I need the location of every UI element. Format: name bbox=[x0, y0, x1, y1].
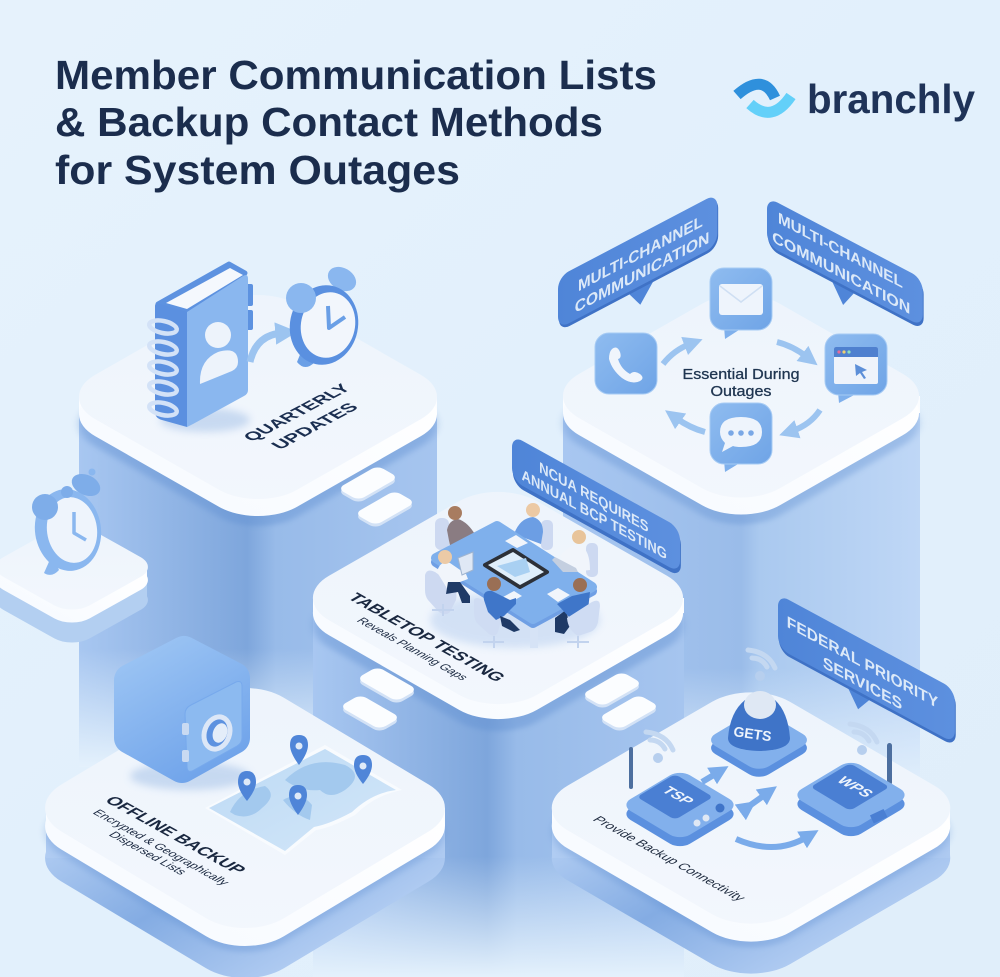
icons: wifi signals bbox=[646, 650, 877, 763]
documents bbox=[503, 535, 570, 602]
laptop: back right bbox=[552, 557, 578, 572]
banner: ncua requires annual bcp testing bbox=[512, 435, 681, 578]
label: essential during outages bbox=[682, 366, 800, 400]
logo: branchly bbox=[737, 76, 975, 122]
label: essential during outages: Outages bbox=[710, 383, 772, 400]
tablet bbox=[485, 550, 547, 587]
title: for System Outages bbox=[55, 147, 460, 193]
pin: left bbox=[238, 771, 256, 801]
icon: gets device: GETS bbox=[733, 723, 773, 744]
icon: wps device bbox=[792, 743, 910, 840]
icon: email bbox=[710, 268, 772, 339]
banner: multi-channel communication right: COMMUNICATION bbox=[772, 229, 910, 318]
label: tabletop testing: Reveals Planning Gaps bbox=[353, 616, 472, 682]
pin: top bbox=[290, 735, 308, 765]
title bbox=[55, 52, 657, 193]
panel: multi-channel platform bbox=[540, 268, 942, 796]
banner: multi-channel communication left: MULTI-CHANNEL bbox=[578, 213, 703, 295]
label: quarterly updates: UPDATES bbox=[267, 400, 363, 452]
banner: multi-channel communication right bbox=[767, 197, 924, 347]
banner: multi-channel communication right: MULTI-CHANNEL bbox=[778, 210, 903, 292]
arrows: device links bbox=[702, 773, 807, 847]
arrows: channel cycle bbox=[663, 342, 820, 432]
table bbox=[436, 526, 592, 648]
banner: multi-channel communication left bbox=[558, 193, 718, 348]
icon: alarm clock bbox=[282, 262, 366, 371]
panel: offline backup platform bbox=[22, 652, 468, 977]
person: left with tablet bbox=[425, 550, 473, 616]
side pills: quarterly platform bbox=[338, 466, 415, 528]
icon: gets device bbox=[705, 691, 813, 780]
panel: small clock platform bbox=[0, 468, 158, 648]
icon: address book bbox=[148, 264, 253, 432]
label: offline backup: OFFLINE BACKUP bbox=[101, 794, 250, 877]
logo: branchly: branchly bbox=[807, 76, 975, 122]
illustration: world map with pins bbox=[205, 735, 402, 855]
label: tabletop testing: TABLETOP TESTING bbox=[344, 591, 510, 684]
person: back right bbox=[560, 530, 598, 577]
banner: federal priority services: FEDERAL PRIORITY bbox=[787, 614, 938, 713]
arrow: book to clock bbox=[250, 333, 282, 362]
title: & Backup Contact Methods bbox=[55, 99, 603, 145]
pin: center bbox=[289, 785, 307, 815]
person: front right bbox=[555, 578, 600, 648]
icon: alarm clock bbox=[30, 468, 106, 575]
panel: tabletop testing platform bbox=[290, 479, 706, 977]
icon: safe bbox=[130, 652, 250, 790]
icon: wps device: WPS bbox=[833, 775, 877, 800]
banner: federal priority services bbox=[778, 594, 956, 762]
banner: multi-channel communication left: COMMUNICATION bbox=[575, 229, 709, 317]
icon: phone bbox=[595, 333, 657, 394]
pin: right bbox=[354, 755, 372, 784]
banner: ncua requires annual bcp testing: ANNUAL BCP TESTING bbox=[522, 466, 667, 564]
illustration: team at conference table bbox=[425, 503, 600, 648]
icon: chat bubble bbox=[710, 403, 772, 472]
icon: web browser bbox=[825, 334, 887, 403]
banner: ncua requires annual bcp testing: NCUA REQUIRES bbox=[539, 459, 649, 537]
label: offline backup: Dispersed Lists bbox=[105, 830, 190, 877]
panel: quarterly updates platform bbox=[56, 262, 460, 767]
label: offline backup: Encrypted & Geographically bbox=[89, 808, 233, 887]
person: back left bbox=[435, 506, 487, 551]
panel: federal priority services platform bbox=[529, 650, 973, 977]
banner: federal priority services: SERVICES bbox=[823, 654, 902, 714]
label: quarterly updates: QUARTERLY bbox=[239, 381, 356, 444]
person: back center bbox=[514, 503, 553, 550]
icon: tsp device bbox=[621, 747, 739, 850]
label: essential during outages: Essential During bbox=[682, 366, 800, 383]
side pills: tabletop platform bbox=[340, 666, 659, 732]
icon: tsp device: TSP bbox=[658, 785, 698, 807]
title: Member Communication Lists bbox=[55, 52, 657, 98]
person: front center bbox=[474, 577, 520, 648]
label: provide backup connectivity: Provide Backup Connectivity bbox=[589, 814, 750, 903]
